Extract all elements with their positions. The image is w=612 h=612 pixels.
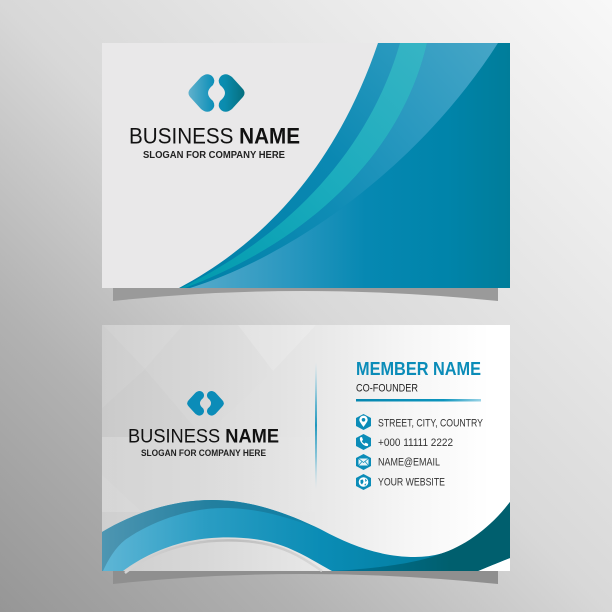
panel: back card	[102, 325, 510, 573]
card base	[102, 325, 510, 571]
heading: member name: MEMBER NAME	[356, 359, 481, 379]
phone text: +000 11111 2222	[378, 437, 453, 449]
slogan: SLOGAN FOR COMPANY HERE	[141, 448, 266, 458]
rule	[356, 399, 481, 402]
icon: phone	[356, 434, 371, 450]
icon: company logo	[188, 74, 244, 112]
panel: back card shadow	[113, 571, 498, 584]
panel: front card shadow	[113, 288, 498, 301]
icon: location pin	[356, 414, 371, 430]
card base	[102, 43, 510, 288]
slogan: SLOGAN FOR COMPANY HERE	[143, 150, 285, 161]
contact: phone	[356, 434, 453, 450]
contact: website	[356, 474, 445, 490]
dark wave top band	[102, 500, 322, 571]
divider spindle	[315, 362, 317, 489]
address text: STREET, CITY, COUNTRY	[378, 418, 484, 430]
heading: business name: BUSINESS NAME	[129, 124, 300, 148]
diamond pattern	[102, 325, 352, 530]
heading: business name: BUSINESS NAME	[128, 426, 279, 448]
gray wave shadow	[125, 540, 322, 573]
email text: NAME@EMAIL	[378, 456, 440, 468]
panel: front card	[102, 43, 510, 288]
contact: email	[356, 454, 440, 470]
curved blue bands	[179, 43, 510, 288]
icon: company logo	[187, 391, 224, 416]
icon: envelope	[356, 454, 371, 470]
icon: globe	[356, 474, 371, 490]
blue wave	[102, 500, 510, 571]
dark teal wave tail	[332, 502, 510, 571]
job title: CO-FOUNDER	[356, 382, 418, 394]
website text: YOUR WEBSITE	[378, 476, 445, 488]
contact: address	[356, 414, 484, 430]
